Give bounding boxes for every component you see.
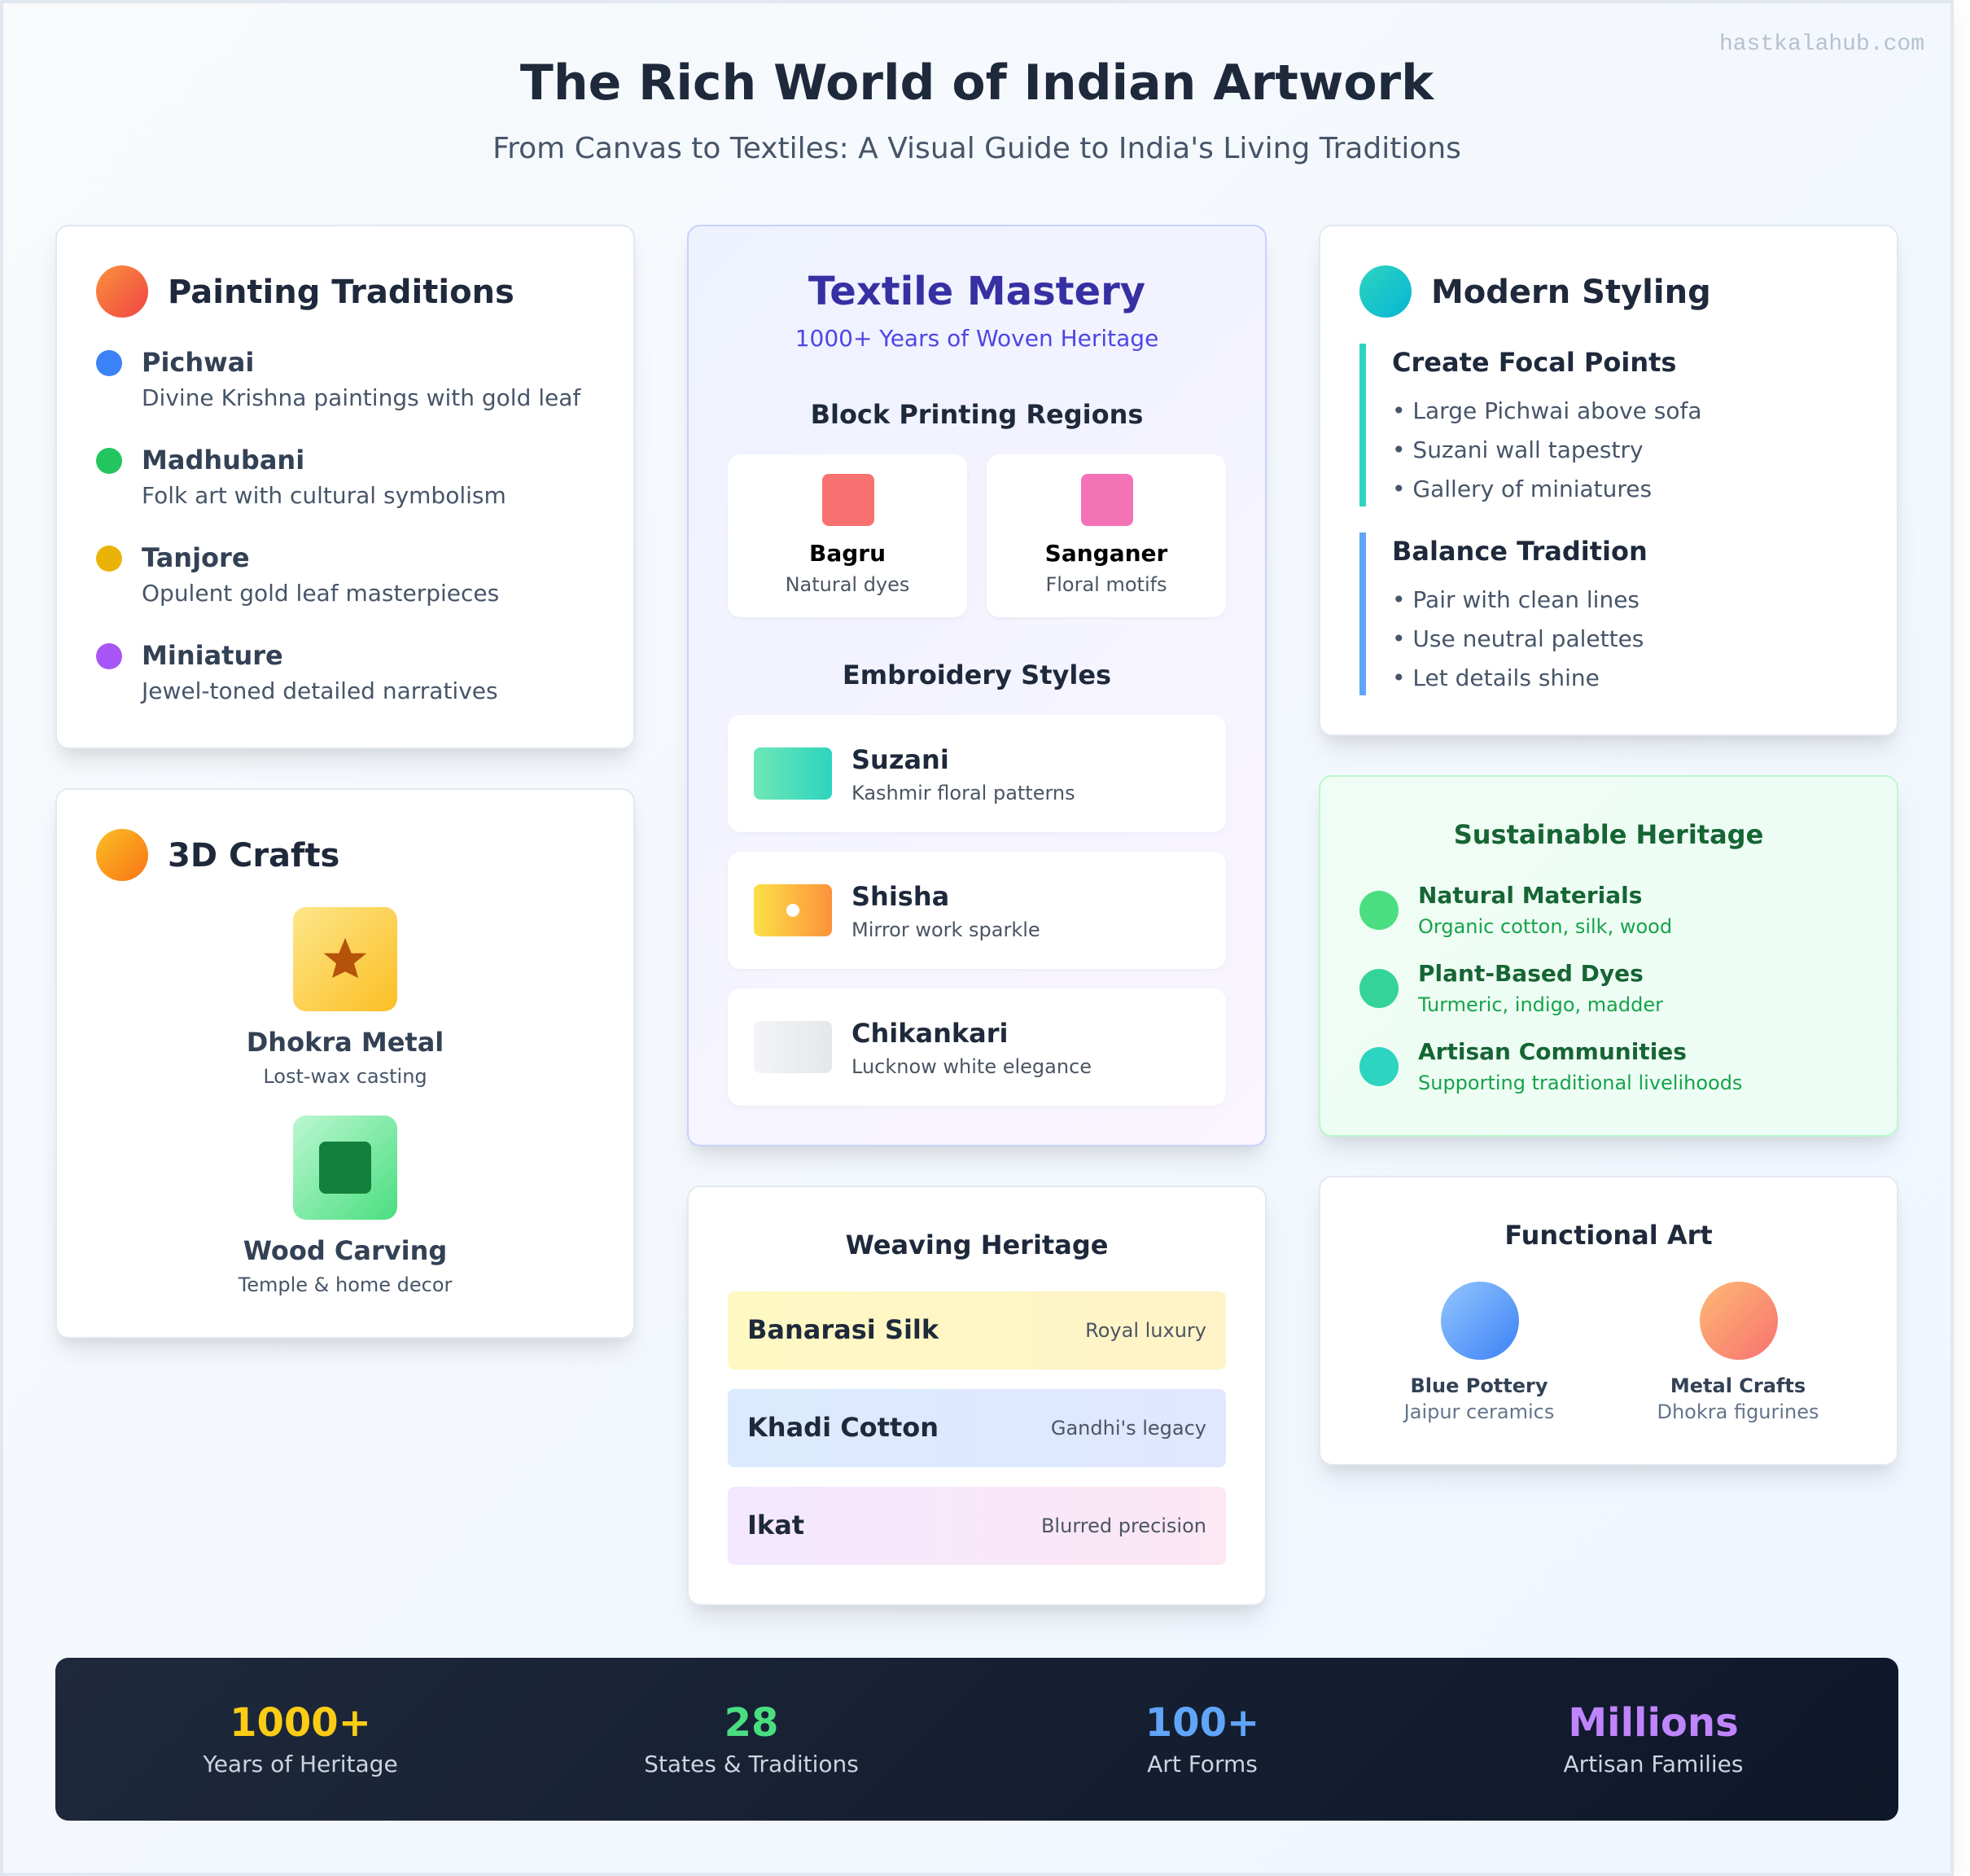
icon: square tile — [293, 1116, 397, 1220]
bullet: • Gallery of miniatures — [1392, 476, 1652, 502]
panel: sustainable heritage — [1319, 775, 1898, 1137]
card: Sanganer — [987, 454, 1226, 617]
name: Shisha — [851, 881, 949, 912]
name: Dhokra Metal — [247, 1027, 444, 1058]
number: 28 — [725, 1700, 778, 1746]
watermark: hastkalahub.com — [1719, 32, 1924, 57]
item: Pichwai — [96, 347, 581, 411]
icon: emerald dot — [1359, 969, 1399, 1008]
row: Shisha — [728, 852, 1226, 969]
row: plant-based dyes — [1359, 960, 1663, 1016]
stat: states and traditions — [644, 1700, 859, 1777]
panel: stats bar — [55, 1658, 1898, 1821]
heading: block printing regions: Block Printing Regions — [811, 399, 1143, 430]
description: Blurred precision — [1041, 1514, 1206, 1537]
name: Natural Materials — [1418, 882, 1642, 909]
panel: modern styling — [1319, 225, 1898, 736]
accent bar — [1359, 344, 1366, 506]
icon: star tile — [293, 907, 397, 1011]
name: Sanganer — [1045, 540, 1167, 567]
item: blue pottery — [1403, 1282, 1554, 1423]
subtitle: From Canvas to Textiles: A Visual Guide to India's Living Traditions — [492, 132, 1461, 165]
description: Temple & home decor — [239, 1273, 452, 1296]
name: Blue Pottery — [1410, 1374, 1548, 1397]
panel: painting traditions — [55, 225, 635, 749]
name: Banarasi Silk — [747, 1314, 939, 1345]
row: Chikankari — [728, 988, 1226, 1106]
description: Mirror work sparkle — [851, 918, 1040, 941]
name: Miniature — [142, 640, 283, 671]
icon: orange circle — [1700, 1282, 1778, 1360]
name: Pichwai — [142, 347, 254, 378]
icon: green dot — [96, 448, 122, 474]
row: artisan communities — [1359, 1038, 1742, 1094]
name: Plant-Based Dyes — [1418, 960, 1644, 987]
subheading: 1000+ Years of Woven Heritage — [795, 325, 1158, 352]
description: Divine Krishna paintings with gold leaf — [142, 384, 580, 411]
description: Jaipur ceramics — [1404, 1400, 1554, 1423]
item: Miniature — [96, 640, 498, 704]
name: Artisan Communities — [1418, 1038, 1687, 1065]
heading: modern styling: Modern Styling — [1431, 274, 1711, 311]
block: balance tradition — [1359, 533, 1648, 695]
name: Khadi Cotton — [747, 1412, 939, 1443]
panel: functional art — [1319, 1176, 1898, 1466]
heading: sustainable heritage: Sustainable Heritage — [1454, 819, 1763, 850]
description: Natural dyes — [786, 573, 909, 596]
bullet: • Large Pichwai above sofa — [1392, 397, 1702, 424]
block: create focal points — [1359, 344, 1702, 506]
icon: styling heading circle — [1359, 265, 1412, 318]
description: Turmeric, indigo, madder — [1418, 993, 1663, 1016]
heading: textile mastery: Textile Mastery — [808, 269, 1145, 314]
icon: green dot — [1359, 891, 1399, 930]
name: Ikat — [747, 1510, 804, 1541]
name: Metal Crafts — [1670, 1374, 1806, 1397]
name: Wood Carving — [243, 1235, 447, 1266]
bullet: • Pair with clean lines — [1392, 586, 1639, 613]
swatch: mirror gradient — [754, 884, 832, 936]
item: Madhubani — [96, 445, 506, 509]
description: Kashmir floral patterns — [851, 782, 1075, 804]
title: The Rich World of Indian Artwork — [520, 55, 1434, 112]
label: Artisan Families — [1564, 1751, 1743, 1777]
name: Tanjore — [142, 542, 250, 573]
swatch: red — [822, 474, 874, 526]
description: Lucknow white elegance — [851, 1055, 1092, 1078]
stat: art forms — [1145, 1700, 1259, 1777]
swatch: teal gradient — [754, 747, 832, 800]
name: Suzani — [851, 744, 949, 775]
icon: crafts heading circle — [96, 829, 148, 881]
row: natural materials — [1359, 882, 1672, 938]
icon: painting heading circle — [96, 265, 148, 318]
panel: weaving heritage — [687, 1186, 1267, 1606]
stat: years of heritage — [203, 1700, 398, 1777]
icon: yellow dot — [96, 546, 122, 572]
number: 1000+ — [230, 1700, 371, 1746]
icon: teal dot — [1359, 1047, 1399, 1086]
description: Floral motifs — [1045, 573, 1167, 596]
block heading: Balance Tradition — [1392, 536, 1648, 567]
bullet: • Let details shine — [1392, 664, 1600, 691]
icon: mirror dot — [786, 904, 799, 917]
description: Supporting traditional livelihoods — [1418, 1072, 1742, 1094]
block heading: Create Focal Points — [1392, 347, 1676, 378]
icon: blue circle — [1441, 1282, 1519, 1360]
heading: embroidery styles: Embroidery Styles — [843, 660, 1111, 690]
description: Royal luxury — [1085, 1319, 1206, 1342]
item: metal crafts — [1657, 1282, 1819, 1423]
description: Jewel-toned detailed narratives — [142, 677, 498, 704]
number: Millions — [1568, 1700, 1739, 1746]
heading: painting traditions: Painting Traditions — [168, 274, 514, 311]
description: Folk art with cultural symbolism — [142, 482, 506, 509]
item: Tanjore — [96, 542, 499, 607]
swatch: grey gradient — [754, 1021, 832, 1073]
label: Art Forms — [1147, 1751, 1258, 1777]
description: Dhokra figurines — [1657, 1400, 1819, 1423]
stat: artisan families — [1563, 1700, 1743, 1777]
row: Khadi Cotton — [728, 1389, 1226, 1467]
icon: purple dot — [96, 643, 122, 669]
row: Suzani — [728, 715, 1226, 832]
bullet: • Suzani wall tapestry — [1392, 436, 1644, 463]
description: Organic cotton, silk, wood — [1418, 915, 1672, 938]
item: Wood Carving — [238, 1116, 453, 1296]
description: Gandhi's legacy — [1051, 1417, 1206, 1440]
heading: functional art: Functional Art — [1504, 1220, 1713, 1251]
heading: weaving heritage: Weaving Heritage — [846, 1229, 1108, 1260]
description: Lost-wax casting — [263, 1065, 427, 1088]
row: Ikat — [728, 1487, 1226, 1565]
bullet: • Use neutral palettes — [1392, 625, 1644, 652]
label: Years of Heritage — [203, 1751, 398, 1777]
name: Madhubani — [142, 445, 304, 476]
heading: 3D crafts: 3D Crafts — [168, 837, 339, 874]
description: Opulent gold leaf masterpieces — [142, 580, 499, 607]
card: Bagru — [728, 454, 967, 617]
panel: 3D crafts — [55, 788, 635, 1339]
swatch: pink — [1081, 474, 1133, 526]
row: Banarasi Silk — [728, 1291, 1226, 1370]
number: 100+ — [1145, 1700, 1259, 1746]
name: Chikankari — [851, 1018, 1009, 1049]
panel: textile mastery — [687, 225, 1267, 1146]
name: Bagru — [809, 540, 886, 567]
item: Dhokra Metal — [247, 907, 444, 1088]
icon: blue dot — [96, 350, 122, 376]
accent bar — [1359, 533, 1366, 695]
label: States & Traditions — [644, 1751, 859, 1777]
